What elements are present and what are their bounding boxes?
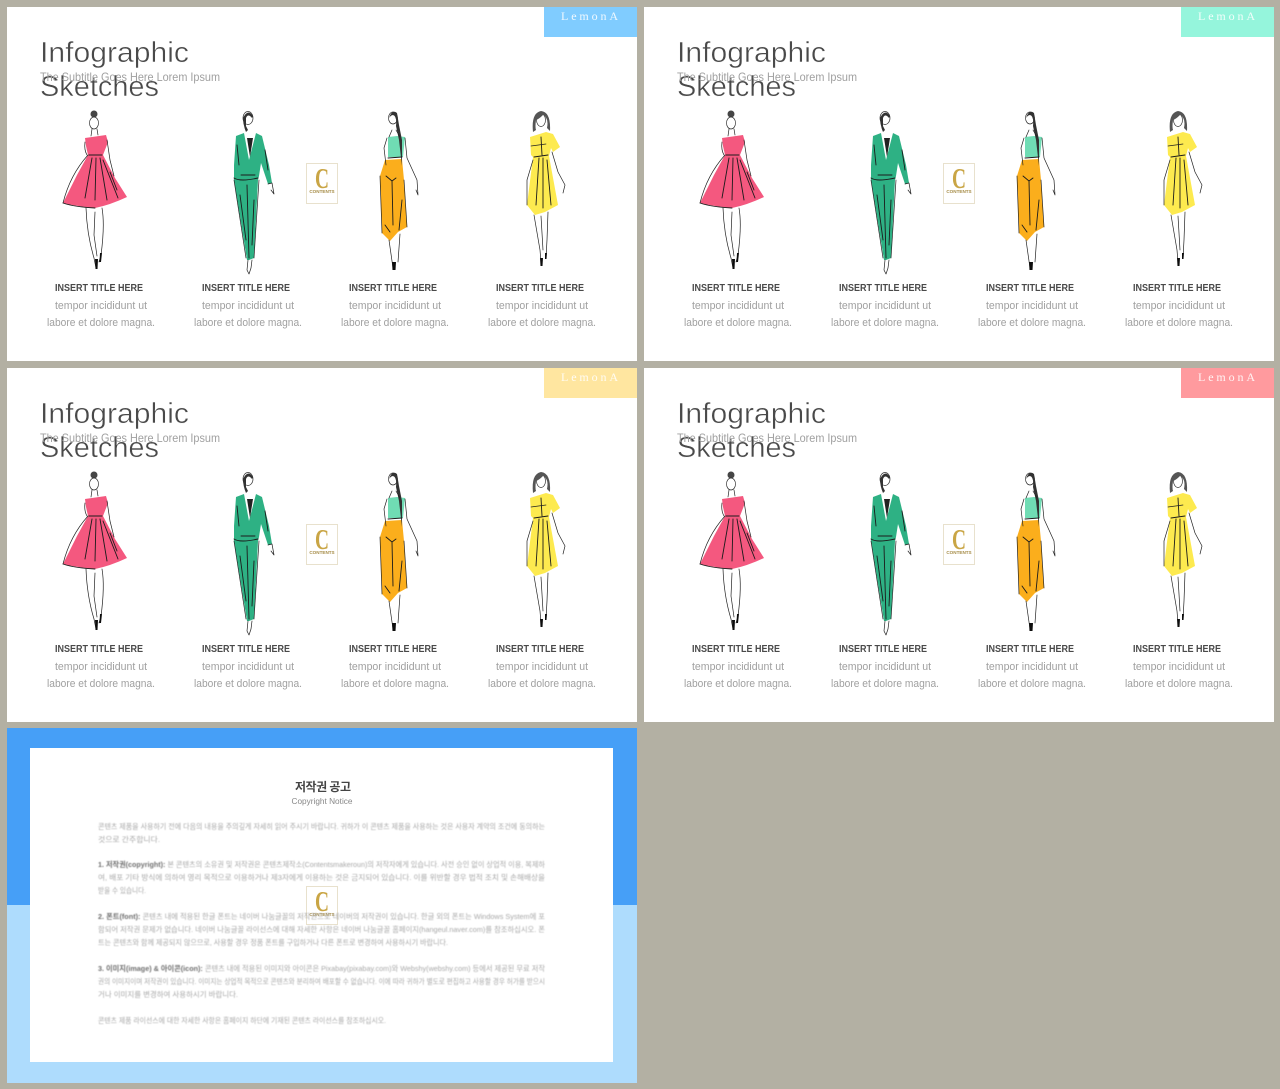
tag: LemonA <box>544 368 637 398</box>
panel: slide 2 <box>644 7 1274 361</box>
notice body text: 트는 콘텐츠와 함께 제공되지 않으므로, 사용할 경우 정품 폰트를 구입하거나 다른 폰트로 변경하여 사용하시기 바랍니다. <box>98 937 448 947</box>
heading: 저작권 공고: 저작권 공고 <box>295 779 351 794</box>
title: Infographic <box>40 398 189 430</box>
caption 2: tempor incididunt ut <box>202 661 294 673</box>
panel: slide 3 <box>7 368 637 722</box>
caption 3 <box>978 282 1086 329</box>
subtitle: The Subtitle Goes Here Lorem Ipsum <box>677 431 857 445</box>
notice body text: 것으로 간주합니다. <box>98 834 160 844</box>
caption 3: tempor incididunt ut <box>986 300 1078 312</box>
caption 1: labore et dolore magna. <box>47 678 155 690</box>
caption 2: tempor incididunt ut <box>839 661 931 673</box>
tag: LemonA: LemonA <box>561 9 618 23</box>
caption 2: labore et dolore magna. <box>831 678 939 690</box>
figure: orange trousers <box>1017 112 1055 270</box>
caption 1 <box>684 643 792 690</box>
notice body text: 거나 이미지를 변경하여 사용하시기 바랍니다. <box>98 989 238 999</box>
caption 4 <box>1125 643 1233 690</box>
subheading: Copyright Notice: Copyright Notice <box>292 796 353 806</box>
caption 3: INSERT TITLE HERE <box>349 282 437 294</box>
title <box>677 37 826 103</box>
caption 2: INSERT TITLE HERE <box>839 643 927 655</box>
figure: yellow dress <box>1164 472 1202 627</box>
caption 1: tempor incididunt ut <box>55 300 147 312</box>
logo: CONTENTS <box>309 189 335 194</box>
caption 3 <box>341 643 449 690</box>
caption 4: INSERT TITLE HERE <box>1133 282 1221 294</box>
caption 1: labore et dolore magna. <box>684 678 792 690</box>
white notice card <box>30 748 613 1062</box>
figure: green suit <box>234 472 274 635</box>
figure: orange trousers <box>380 112 418 270</box>
caption 1 <box>47 643 155 690</box>
notice body text: 콘텐츠 제품 라이선스에 대한 자세한 사항은 홈페이지 하단에 기재된 콘텐츠 라이선스를 참조하십시오. <box>98 1015 386 1025</box>
logo: CONTENTS <box>946 550 972 555</box>
caption 4: labore et dolore magna. <box>488 678 596 690</box>
caption 3: tempor incididunt ut <box>349 661 441 673</box>
caption 4: INSERT TITLE HERE <box>496 282 584 294</box>
caption 3: INSERT TITLE HERE <box>349 643 437 655</box>
title: Sketches <box>677 71 796 103</box>
caption 1: tempor incididunt ut <box>692 661 784 673</box>
subtitle: The Subtitle Goes Here Lorem Ipsum <box>677 70 857 84</box>
figure: green suit <box>234 112 274 274</box>
panel: copyright notice <box>7 728 637 1083</box>
panel: slide 4 <box>644 368 1274 722</box>
title: Infographic <box>677 37 826 69</box>
caption 4: tempor incididunt ut <box>1133 300 1225 312</box>
logo <box>306 886 338 924</box>
slide background <box>7 368 637 722</box>
caption 2: tempor incididunt ut <box>202 300 294 312</box>
logo: C <box>952 524 966 556</box>
logo: CONTENTS <box>946 189 972 194</box>
caption 4: tempor incididunt ut <box>496 661 588 673</box>
caption 2: INSERT TITLE HERE <box>839 282 927 294</box>
caption 2 <box>831 643 939 690</box>
caption 4 <box>1125 282 1233 329</box>
notice body text: 2. 폰트(font): 콘텐츠 내에 적용된 한글 폰트는 네이버 나눔글꼴의 저작권으로 네이버의 저작권이 있습니다. 한글 외의 폰트는 Windows System에 포 <box>98 911 545 921</box>
caption 1: INSERT TITLE HERE <box>692 282 780 294</box>
title: Sketches <box>40 71 159 103</box>
caption 1: labore et dolore magna. <box>47 317 155 329</box>
tag: LemonA: LemonA <box>561 370 618 384</box>
figure: green suit <box>871 112 911 274</box>
caption 3: labore et dolore magna. <box>978 317 1086 329</box>
caption 2 <box>194 643 302 690</box>
caption 1: tempor incididunt ut <box>55 661 147 673</box>
logo <box>944 524 974 564</box>
caption 2: tempor incididunt ut <box>839 300 931 312</box>
tag: LemonA <box>1181 368 1274 398</box>
caption 3: labore et dolore magna. <box>341 317 449 329</box>
caption 1: INSERT TITLE HERE <box>692 643 780 655</box>
caption 3 <box>341 282 449 329</box>
caption 4: labore et dolore magna. <box>488 317 596 329</box>
title <box>40 398 189 464</box>
caption 1 <box>47 282 155 329</box>
caption 3: labore et dolore magna. <box>978 678 1086 690</box>
subtitle: The Subtitle Goes Here Lorem Ipsum <box>40 431 220 445</box>
caption 3 <box>978 643 1086 690</box>
logo: C <box>952 163 966 195</box>
figure: yellow dress <box>1164 111 1202 266</box>
logo <box>306 524 338 564</box>
caption 1: INSERT TITLE HERE <box>55 282 143 294</box>
caption 2: labore et dolore magna. <box>831 317 939 329</box>
caption 2: INSERT TITLE HERE <box>202 282 290 294</box>
tag: LemonA: LemonA <box>1198 9 1255 23</box>
caption 3: INSERT TITLE HERE <box>986 643 1074 655</box>
figure: pink dress <box>63 472 127 630</box>
notice body text: 여, 배포 기타 방식에 의하여 영리 목적으로 이용하거나 제3자에게 이용하는 것은 금지되어 있습니다. 이를 위반할 경우 법적 조치 및 손해배상을 <box>98 872 545 882</box>
notice body text <box>98 821 545 1025</box>
caption 4 <box>488 643 596 690</box>
title: Sketches <box>677 432 796 464</box>
caption 3: labore et dolore magna. <box>341 678 449 690</box>
caption 2: labore et dolore magna. <box>194 317 302 329</box>
logo <box>944 163 974 204</box>
caption 4: INSERT TITLE HERE <box>1133 643 1221 655</box>
caption 3: tempor incididunt ut <box>349 300 441 312</box>
figure: pink dress <box>700 110 764 269</box>
logo <box>306 163 338 204</box>
caption 4: tempor incididunt ut <box>496 300 588 312</box>
tag: LemonA: LemonA <box>1198 370 1255 384</box>
logo: C <box>315 886 329 918</box>
caption 4 <box>488 282 596 329</box>
caption 2 <box>831 282 939 329</box>
figure: yellow dress <box>527 111 565 266</box>
caption 4: labore et dolore magna. <box>1125 317 1233 329</box>
title: Infographic <box>677 398 826 430</box>
logo: C <box>315 524 329 556</box>
title <box>677 398 826 464</box>
figure: orange trousers <box>380 473 418 631</box>
notice body text: 1. 저작권(copyright): 본 콘텐츠의 소유권 및 저작권은 콘텐츠제작소(Contentsmakeroun)의 저작자에게 있습니다. 사전 승인 없이 상업적 이용, 복제하 <box>98 859 545 869</box>
logo: CONTENTS <box>309 550 335 555</box>
caption 4: tempor incididunt ut <box>1133 661 1225 673</box>
title: Infographic <box>40 37 189 69</box>
caption 2 <box>194 282 302 329</box>
tag: LemonA <box>1181 7 1274 37</box>
caption 1: INSERT TITLE HERE <box>55 643 143 655</box>
logo: CONTENTS <box>309 912 335 917</box>
notice body text: 콘텐츠 제품을 사용하기 전에 다음의 내용을 주의깊게 자세히 읽어 주시기 바랍니다. 귀하가 이 콘텐츠 제품을 사용하는 것은 사용자 계약의 조건에 동의하는 <box>98 821 545 831</box>
tag: LemonA <box>544 7 637 37</box>
caption 4: labore et dolore magna. <box>1125 678 1233 690</box>
notice body text: 3. 이미지(image) & 아이콘(icon): 콘텐츠 내에 적용된 이미지와 아이콘은 Pixabay(pixabay.com)와 Webshy(webshy.com) 등에서 제공된 무료 저작 <box>98 963 545 973</box>
slide background <box>644 368 1274 722</box>
figure: pink dress <box>63 110 127 269</box>
caption 1: tempor incididunt ut <box>692 300 784 312</box>
caption 2: labore et dolore magna. <box>194 678 302 690</box>
notice body text: 권의 이미지이며 저작권이 있습니다. 이미지는 상업적 목적으로 콘텐츠와 분리하여 배포할 수 없습니다. 이에 따라 귀하가 별도로 편집하고 사용할 경우 허가를 받으시 <box>98 976 545 986</box>
caption 4: INSERT TITLE HERE <box>496 643 584 655</box>
caption 3: tempor incididunt ut <box>986 661 1078 673</box>
figure: green suit <box>871 472 911 635</box>
slide background <box>7 7 637 361</box>
caption 3: INSERT TITLE HERE <box>986 282 1074 294</box>
figure: orange trousers <box>1017 473 1055 631</box>
caption 1 <box>684 282 792 329</box>
logo: C <box>315 163 329 195</box>
title: Sketches <box>40 432 159 464</box>
slide background <box>644 7 1274 361</box>
caption 2: INSERT TITLE HERE <box>202 643 290 655</box>
caption 1: labore et dolore magna. <box>684 317 792 329</box>
figure: pink dress <box>700 472 764 630</box>
subtitle: The Subtitle Goes Here Lorem Ipsum <box>40 70 220 84</box>
figure: yellow dress <box>527 472 565 627</box>
panel: slide 1 <box>7 7 637 361</box>
light blue lower band <box>7 905 637 1083</box>
title <box>40 37 189 103</box>
notice body text: 받을 수 있습니다. <box>98 885 146 895</box>
blue upper band <box>7 728 637 905</box>
notice body text: 함되어 저작권 문제가 없습니다. 네이버 나눔글꼴 라이선스에 대해 자세한 사항은 네이버 나눔글꼴 홈페이지(hangeul.naver.com)를 참조하십시오. 폰 <box>98 924 545 934</box>
